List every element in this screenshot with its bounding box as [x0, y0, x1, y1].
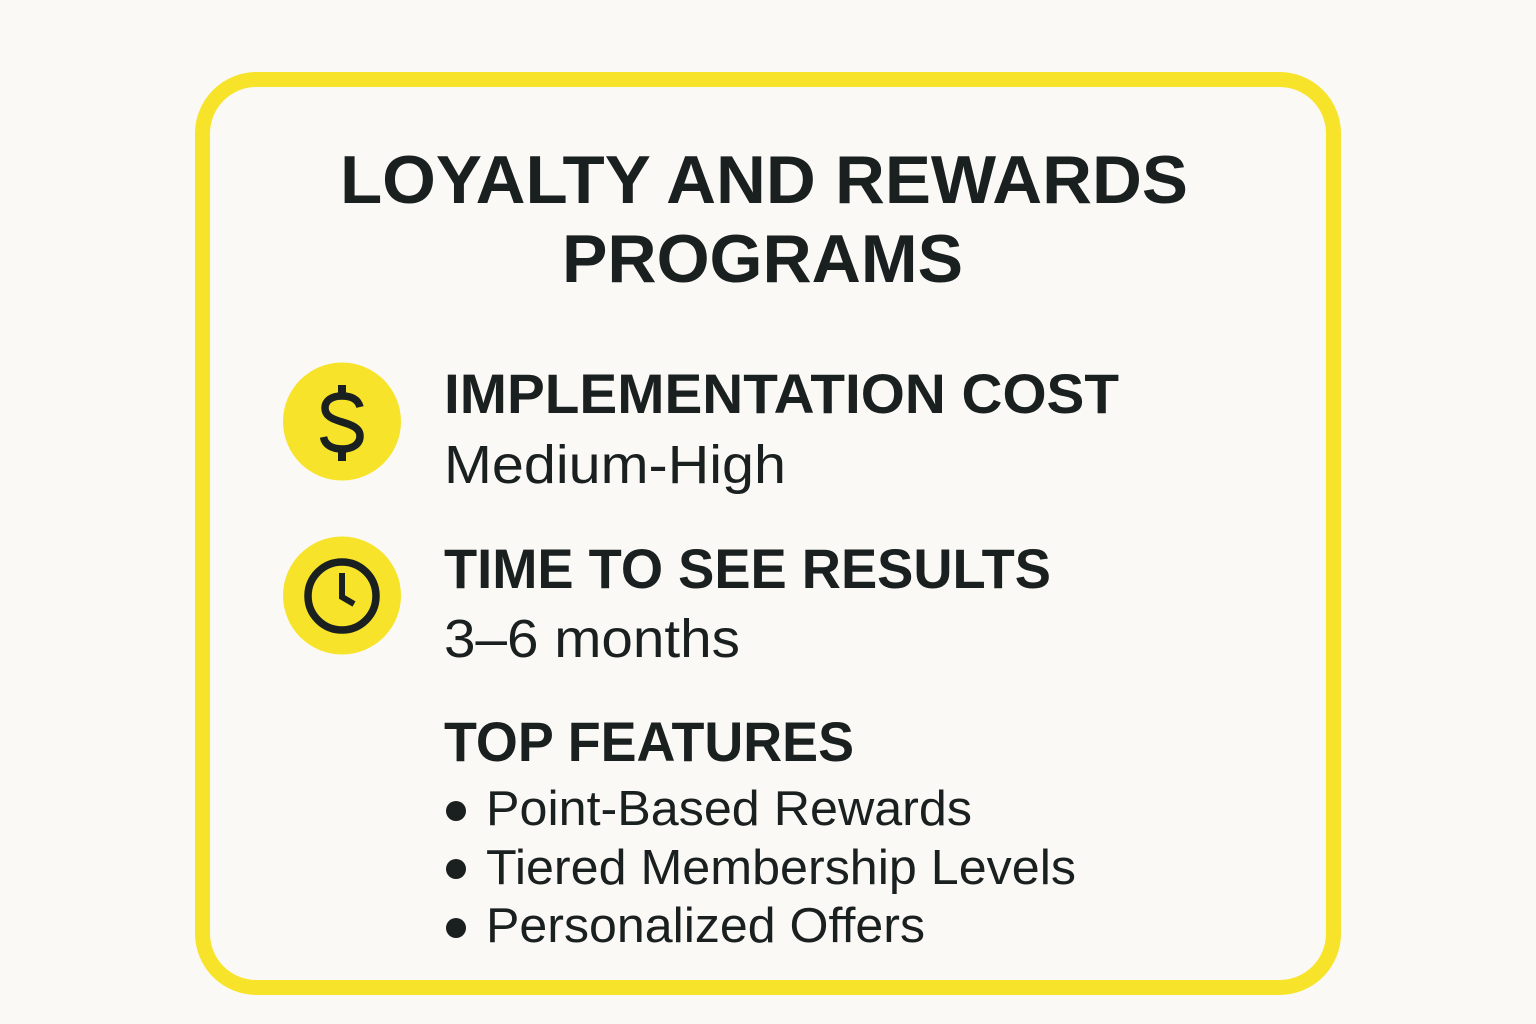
block: time to see results: TIME TO SEE RESULTS — [444, 537, 1051, 600]
block: implementation cost: IMPLEMENTATION COST — [444, 362, 1119, 425]
panel: card with yellow border — [202, 80, 1334, 988]
list: top features — [446, 782, 1076, 953]
title: LOYALTY AND REWARDS — [340, 142, 1188, 218]
title — [340, 142, 1188, 297]
title: PROGRAMS — [562, 221, 963, 297]
block: time to see results: 3–6 months — [444, 609, 740, 669]
icon: dollar sign in yellow circle — [283, 362, 401, 480]
icon: clock in yellow circle — [283, 536, 401, 654]
list: top features: Point-Based Rewards — [486, 782, 972, 836]
block: time to see results — [444, 537, 1051, 669]
block: implementation cost — [444, 362, 1119, 495]
list: top features: Tiered Membership Levels — [486, 841, 1076, 895]
heading: top features: TOP FEATURES — [444, 710, 854, 773]
list: top features: Personalized Offers — [486, 899, 925, 953]
block: implementation cost: Medium-High — [444, 435, 786, 495]
